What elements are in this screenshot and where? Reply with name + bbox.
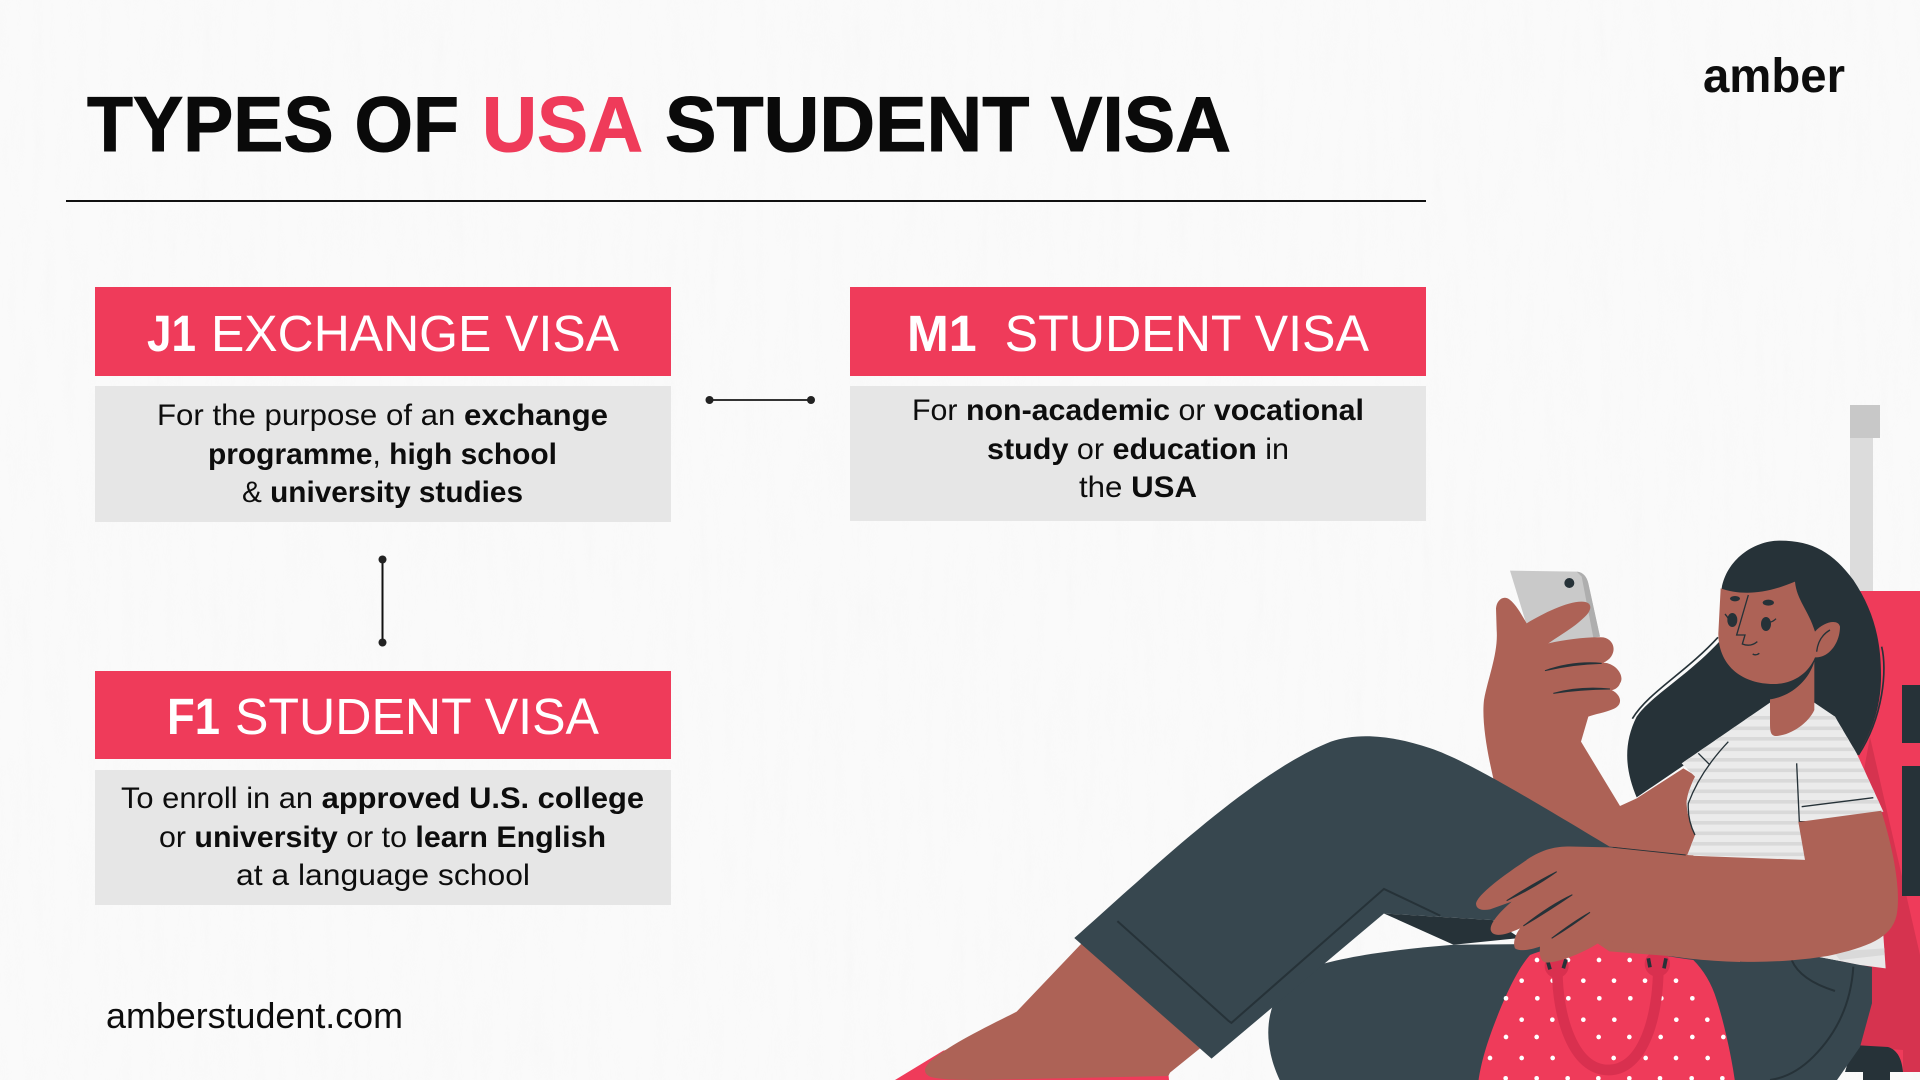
F1 header: STUDENT VISA [235,688,599,745]
F1 description: To enroll in an approved U.S. college [121,782,644,815]
title: STUDENT VISA [665,80,1231,168]
shirt hem [1815,935,1886,968]
phone [1510,571,1600,644]
connector: J1 to M1 [706,396,815,404]
panel: F1 student visa [95,671,671,905]
t-shirt [1682,703,1883,860]
F1 header: F1 [167,688,220,745]
panel: J1 exchange visa [95,287,671,522]
raised leg: jeans [1074,736,1686,1059]
suitcase [1840,405,1920,1080]
M1 description: For non-academic or vocational [912,394,1364,427]
foot and red shoe [895,943,1200,1080]
polka dot bag [1478,937,1735,1080]
hair back [1627,541,1884,797]
M1 header [850,287,1426,376]
J1 description: & university studies [242,476,523,509]
F1 description: at a language school [236,859,530,892]
logo: amber: amber [1703,50,1845,103]
pocket lines [1770,960,1853,1080]
J1 description: For the purpose of an exchange [157,399,608,432]
connector: J1 to F1 [378,556,386,646]
F1 header [95,671,671,759]
raised arm and hand [1483,598,1700,857]
M1 header: M1 STUDENT VISA [907,305,1369,362]
J1 header: EXCHANGE VISA [211,305,619,362]
head and face [1718,582,1840,736]
website url: amberstudent.com [106,995,403,1036]
title: TYPES OF [87,80,459,168]
M1 description [850,386,1426,521]
M1 description: the USA [1079,471,1197,504]
J1 header: J1 [147,305,196,362]
M1 description: study or education in [987,433,1289,466]
illustration: student with phone sitting against suitcase [895,405,1920,1080]
hand on knee [1476,860,1740,963]
J1 description [95,386,671,522]
panel: M1 student visa [850,287,1426,521]
title [87,80,1231,168]
lower arm [1527,811,1898,962]
lower leg: jeans [1268,943,1872,1080]
F1 description: or university or to learn English [159,821,606,854]
J1 header [95,287,671,376]
J1 description: programme, high school [208,438,557,471]
title: USA [482,80,643,168]
F1 description [95,770,671,905]
